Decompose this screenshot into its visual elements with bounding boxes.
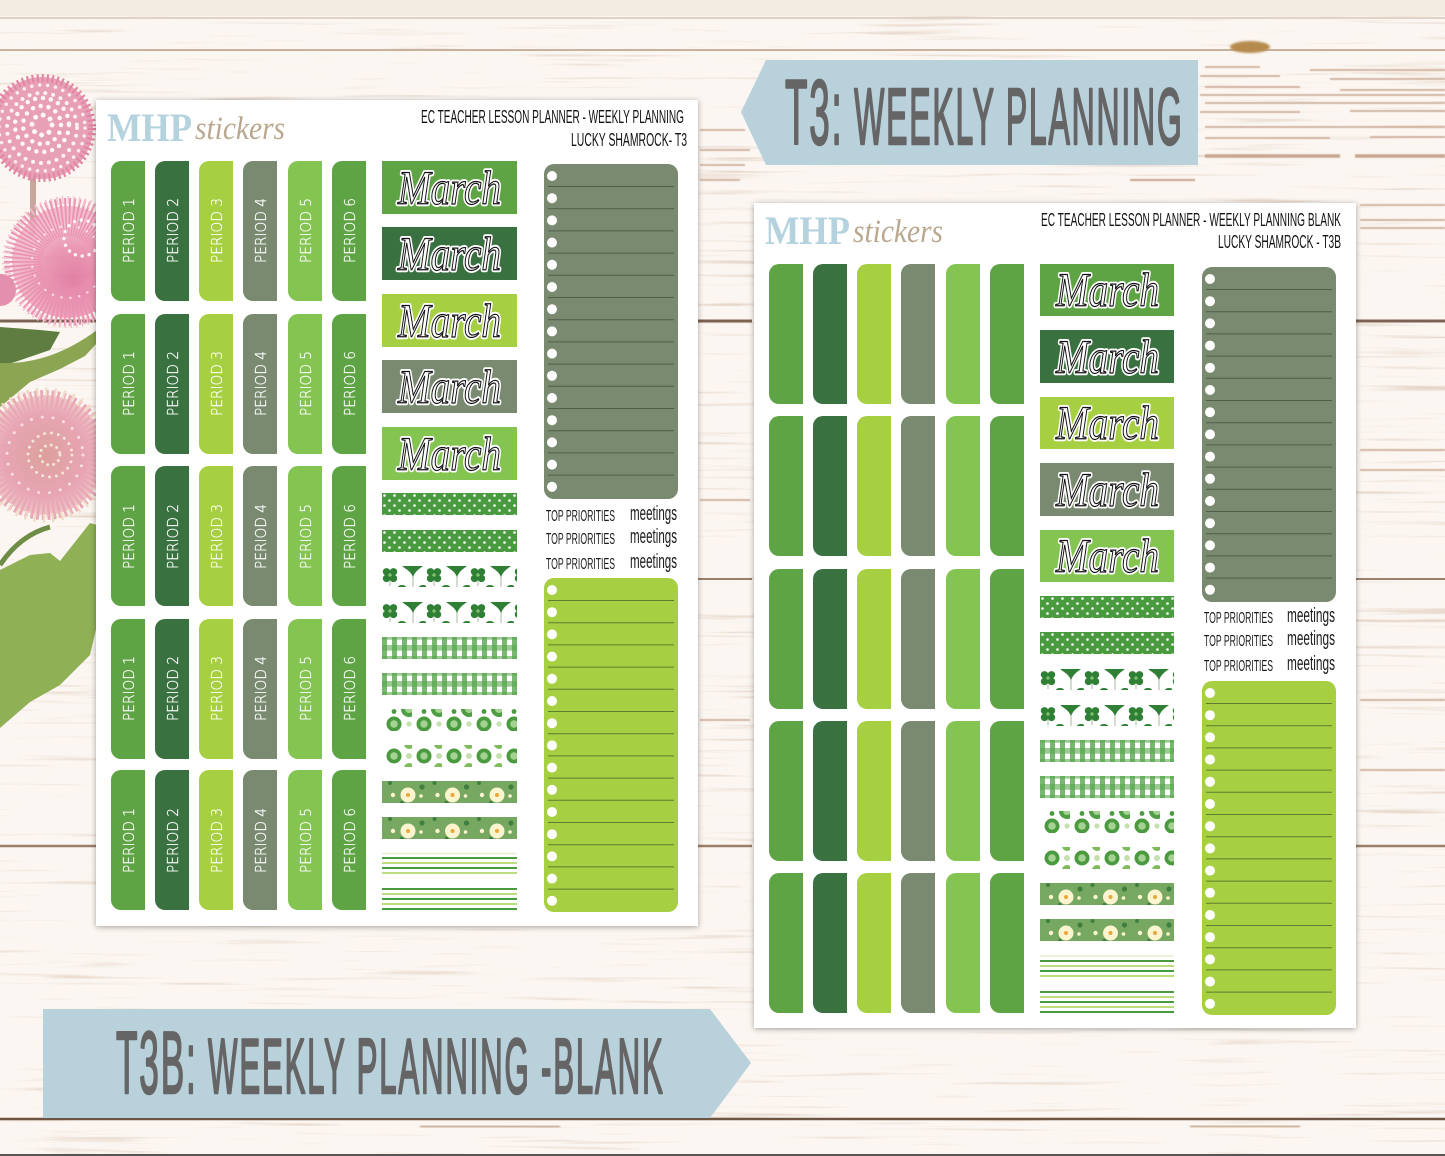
March labels: March <box>1055 530 1159 583</box>
small labels: meetings <box>1287 628 1335 650</box>
period tabs: PERIOD 5 <box>297 504 315 569</box>
period tabs: PERIOD 1 <box>120 198 138 263</box>
washi strips <box>1040 596 1174 1012</box>
panel: sticker sheet T3 <box>96 100 698 926</box>
logo <box>107 105 285 150</box>
leaf: upper light leaf <box>0 330 97 407</box>
panel: grey notes list <box>544 164 678 499</box>
period tabs: PERIOD 5 <box>297 656 315 721</box>
period tabs: PERIOD 3 <box>208 504 226 569</box>
small labels <box>546 503 677 573</box>
March labels <box>1040 264 1174 583</box>
logo: MHP <box>107 105 192 150</box>
period tabs: PERIOD 6 <box>341 808 359 873</box>
banner text: T3B: WEEKLY PLANNING -BLANK <box>116 1014 663 1113</box>
small labels: TOP PRIORITIES <box>1204 633 1273 650</box>
period tabs: PERIOD 4 <box>252 504 270 569</box>
flower: middle <box>0 200 130 324</box>
March labels: March <box>397 295 501 348</box>
sheet title: LUCKY SHAMROCK - T3B <box>1218 232 1341 252</box>
March labels: March <box>1055 530 1159 583</box>
period tabs: PERIOD 1 <box>120 656 138 721</box>
March labels: March <box>397 295 501 348</box>
period tabs: PERIOD 6 <box>341 656 359 721</box>
March labels: March <box>1055 264 1159 317</box>
March labels: March <box>397 428 501 481</box>
March labels: March <box>397 428 501 481</box>
period tabs: PERIOD 2 <box>164 504 182 569</box>
March labels: March <box>397 361 501 414</box>
small labels: TOP PRIORITIES <box>1204 658 1273 675</box>
period tabs: PERIOD 3 <box>208 198 226 263</box>
period tabs: PERIOD 2 <box>164 808 182 873</box>
period tabs: PERIOD 6 <box>341 198 359 263</box>
March labels: March <box>397 228 501 281</box>
March labels: March <box>397 361 501 414</box>
leaf: lower large leaf <box>0 523 97 728</box>
flower: top <box>0 77 93 179</box>
period tabs: PERIOD 2 <box>164 351 182 416</box>
panel: grey notes list <box>1202 267 1336 602</box>
stem: upper <box>30 175 36 235</box>
leaf: dark upper leaf <box>0 327 60 366</box>
March labels: March <box>1055 331 1159 384</box>
small labels: TOP PRIORITIES <box>546 531 615 548</box>
small labels: meetings <box>1287 605 1335 627</box>
logo: stickers <box>195 111 285 147</box>
period tabs: PERIOD 6 <box>341 504 359 569</box>
March labels: March <box>1055 397 1159 450</box>
March labels: March <box>397 162 501 215</box>
period tabs: PERIOD 1 <box>120 351 138 416</box>
period tabs: PERIOD 2 <box>164 198 182 263</box>
period tabs <box>111 161 366 910</box>
period tabs: PERIOD 2 <box>164 656 182 721</box>
March labels: March <box>1055 331 1159 384</box>
logo: stickers <box>853 214 943 250</box>
small labels: meetings <box>630 503 677 525</box>
period tabs: PERIOD 6 <box>341 351 359 416</box>
flower: lower <box>0 392 108 518</box>
sheet title: EC TEACHER LESSON PLANNER - WEEKLY PLANNING <box>421 107 684 127</box>
March labels: March <box>1055 397 1159 450</box>
period tabs: PERIOD 4 <box>252 351 270 416</box>
panel: green notes list <box>544 578 678 912</box>
period tabs: PERIOD 3 <box>208 808 226 873</box>
period tabs: PERIOD 1 <box>120 504 138 569</box>
period tabs: PERIOD 4 <box>252 808 270 873</box>
logo: MHP <box>765 208 850 253</box>
panel: sticker sheet T3B blank <box>754 203 1356 1028</box>
period tabs: PERIOD 3 <box>208 351 226 416</box>
stem: lower <box>0 527 50 565</box>
small labels: TOP PRIORITIES <box>546 556 615 573</box>
banner text: T3: WEEKLY PLANNING <box>785 61 1182 164</box>
period tabs: PERIOD 3 <box>208 656 226 721</box>
period tabs: PERIOD 5 <box>297 351 315 416</box>
sheet title <box>1041 210 1341 252</box>
March labels <box>382 161 517 481</box>
March labels: March <box>1055 464 1159 517</box>
period tabs: PERIOD 5 <box>297 808 315 873</box>
small labels: meetings <box>630 551 677 573</box>
small labels: meetings <box>630 526 677 548</box>
small labels: TOP PRIORITIES <box>1204 610 1273 627</box>
small labels <box>1204 605 1335 675</box>
sheet title <box>421 107 687 150</box>
washi strips <box>382 493 517 909</box>
small labels: meetings <box>1287 653 1335 675</box>
blank tabs <box>769 264 1024 1013</box>
period tabs: PERIOD 5 <box>297 198 315 263</box>
small labels: TOP PRIORITIES <box>546 508 615 525</box>
March labels: March <box>1055 464 1159 517</box>
logo <box>765 208 943 253</box>
panel: green notes list <box>1202 681 1336 1015</box>
period tabs: PERIOD 4 <box>252 656 270 721</box>
March labels: March <box>397 162 501 215</box>
March labels: March <box>1055 264 1159 317</box>
banner: T3 weekly planning <box>741 60 1198 165</box>
decoration: pink flowers and green leaves <box>0 77 130 728</box>
sheet title: LUCKY SHAMROCK- T3 <box>571 130 687 150</box>
March labels: March <box>397 228 501 281</box>
period tabs: PERIOD 4 <box>252 198 270 263</box>
banner: T3B weekly planning blank <box>43 1009 751 1118</box>
period tabs: PERIOD 1 <box>120 808 138 873</box>
